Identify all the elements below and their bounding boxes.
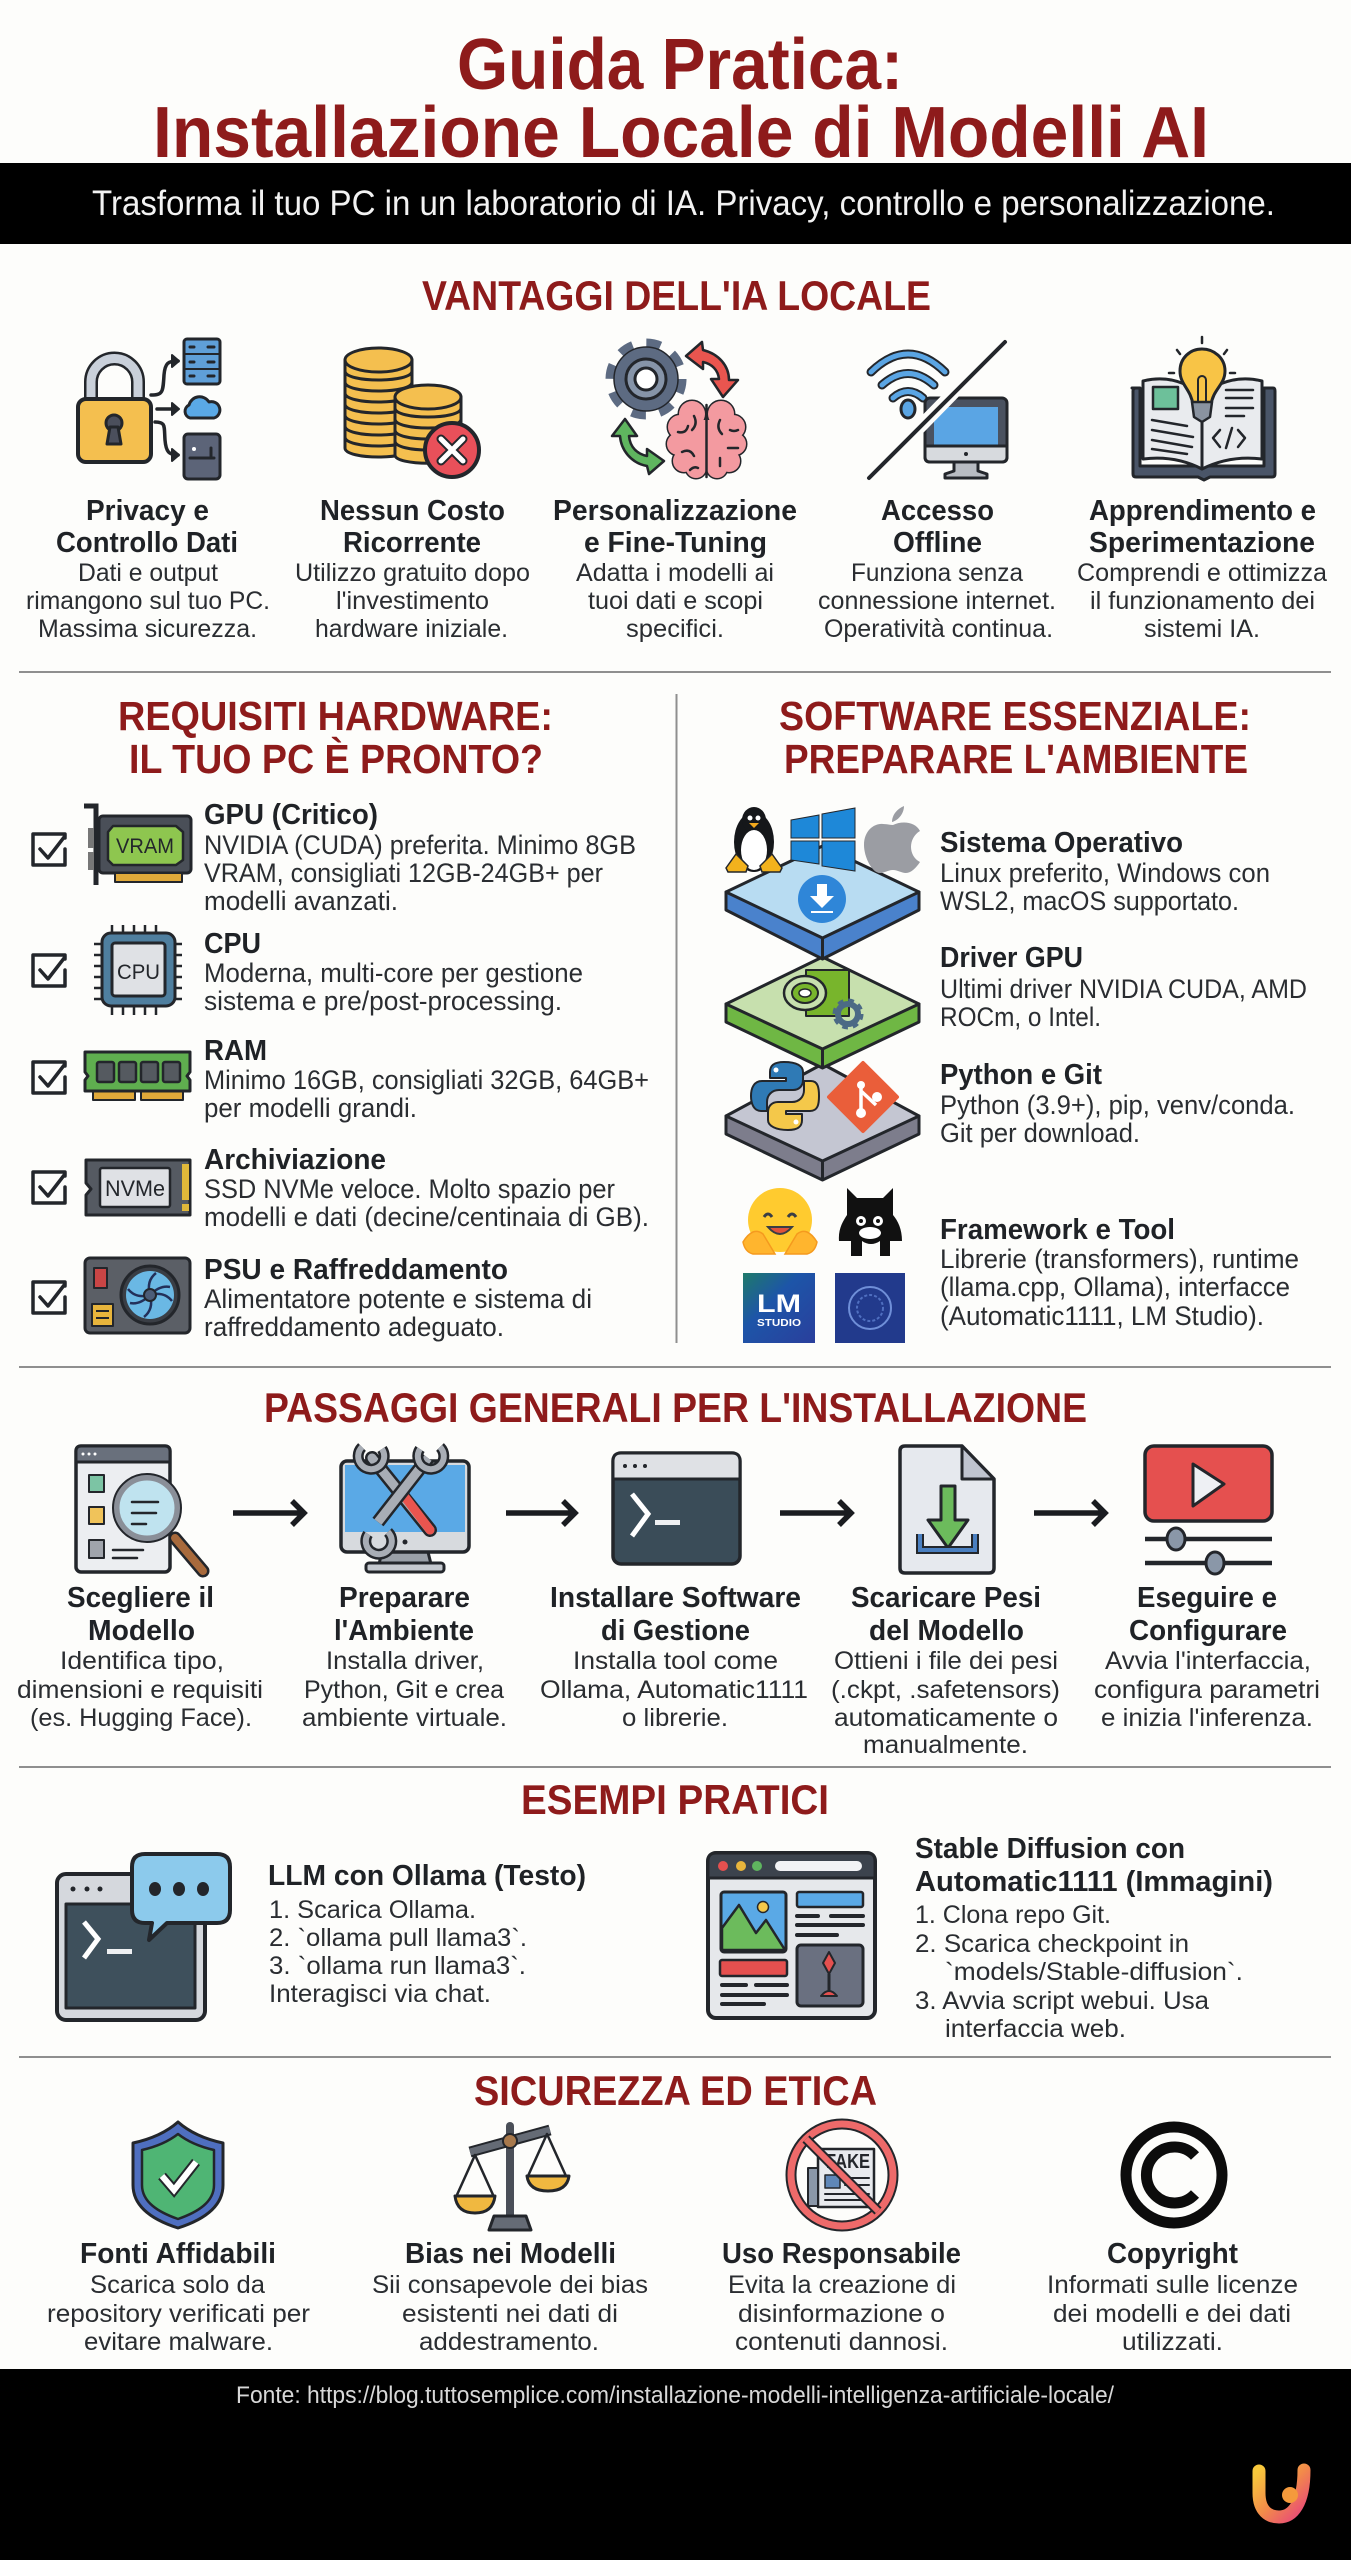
icon: brand logo xyxy=(1259,2470,1304,2517)
icon: prepare environment xyxy=(341,1447,469,1572)
text: python e git xyxy=(940,1059,1295,1148)
title xyxy=(153,25,1209,173)
text: LLM con Ollama: LLM con Ollama (Testo) xyxy=(268,1860,586,1892)
card: accesso offline: Funziona senza xyxy=(851,559,1023,587)
step: eseguire xyxy=(1094,1582,1320,1732)
text: CPU: sistema e pre/post-processing. xyxy=(204,986,562,1016)
text: PSU: PSU e Raffreddamento xyxy=(204,1254,508,1286)
icon: software layer stack xyxy=(726,806,920,1343)
text: archiviazione: modelli e dati (decine/centinaia di GB). xyxy=(204,1202,649,1232)
card: uso responsabile xyxy=(722,2238,961,2356)
text: CPU xyxy=(204,928,583,1016)
text: PSU: raffreddamento adeguato. xyxy=(204,1312,504,1342)
card: nessun costo: Utilizzo gratuito dopo xyxy=(295,559,530,587)
text: PSU xyxy=(204,1254,592,1342)
icon: coins with cross xyxy=(345,348,479,477)
card: accesso offline: Offline xyxy=(893,527,982,559)
text: LLM con Ollama: 2. `ollama pull llama3`. xyxy=(269,1924,527,1952)
card: nessun costo: Nessun Costo xyxy=(320,495,505,527)
card: apprendimento xyxy=(1077,495,1327,643)
card: uso responsabile: Uso Responsabile xyxy=(722,2238,961,2270)
icon: NVMe: NVMe xyxy=(105,1176,165,1201)
icon: balance scale xyxy=(455,2126,569,2230)
text: driver GPU: ROCm, o Intel. xyxy=(940,1002,1101,1032)
text: LLM con Ollama: Interagisci via chat. xyxy=(269,1980,491,2008)
card: bias: Bias nei Modelli xyxy=(405,2238,616,2270)
icon: LM Studio: LM xyxy=(757,1290,801,1318)
card: uso responsabile: Evita la creazione di xyxy=(728,2271,956,2299)
step: scegliere: Identifica tipo, xyxy=(60,1647,224,1675)
card: accesso offline: Operatività continua. xyxy=(824,615,1053,643)
card: apprendimento: Comprendi e ottimizza xyxy=(1077,559,1327,587)
icon: linux penguin xyxy=(726,807,782,872)
icon: open book with bulb xyxy=(1132,337,1275,480)
footer xyxy=(0,2369,1351,2560)
text: stable diffusion: Automatic1111 (Immagini) xyxy=(915,1866,1273,1898)
text: LLM con Ollama: 1. Scarica Ollama. xyxy=(269,1896,476,1924)
text: archiviazione xyxy=(204,1144,649,1232)
card: personalizzazione: specifici. xyxy=(626,615,724,643)
heading: software essenziale xyxy=(779,693,1251,782)
arrow 3 xyxy=(780,1501,851,1525)
text: stable diffusion: 1. Clona repo Git. xyxy=(915,1901,1111,1929)
heading: software essenziale: PREPARARE L'AMBIENTE xyxy=(784,736,1248,782)
card: uso responsabile: contenuti dannosi. xyxy=(735,2328,948,2356)
text: framework e tool: Librerie (transformers), runtime xyxy=(940,1244,1299,1274)
step: preparare: l'Ambiente xyxy=(334,1615,474,1647)
heading: vantaggi: VANTAGGI DELL'IA LOCALE xyxy=(422,272,931,319)
icon: windows logo xyxy=(791,808,855,871)
card: nessun costo: hardware iniziale. xyxy=(315,615,508,643)
icon: automatic1111 logo xyxy=(835,1273,905,1343)
text: GPU: GPU (Critico) xyxy=(204,799,378,831)
card: copyright: Copyright xyxy=(1107,2238,1238,2270)
arrow 1 xyxy=(233,1501,304,1525)
icon: terminal with chat bubble xyxy=(57,1854,230,2020)
card: nessun costo: Ricorrente xyxy=(343,527,481,559)
icon: hugging face xyxy=(743,1188,817,1254)
card: privacy xyxy=(26,495,270,643)
text: sistema operativo: Linux preferito, Windows con xyxy=(940,858,1270,888)
card: fonti affidabili: Scarica solo da xyxy=(90,2271,265,2299)
step: scegliere: Modello xyxy=(88,1615,195,1647)
text: GPU xyxy=(204,799,636,916)
icon: RAM xyxy=(85,1052,190,1100)
step: scaricare xyxy=(831,1582,1060,1759)
step: scaricare: del Modello xyxy=(869,1615,1024,1647)
card: fonti affidabili: repository verificati per xyxy=(47,2300,310,2328)
step: installare: Installare Software xyxy=(550,1582,801,1614)
icon: green layer with nvidia xyxy=(726,957,919,1068)
heading: requisiti hardware xyxy=(118,693,553,782)
icon: GPU: VRAM xyxy=(116,835,174,858)
text: framework e tool: (Automatic1111, LM Studio). xyxy=(940,1301,1264,1331)
step: scegliere xyxy=(17,1582,263,1732)
step: eseguire: Eseguire e xyxy=(1137,1582,1277,1614)
step: installare: o librerie. xyxy=(622,1704,728,1732)
source line: Fonte: https://blog.tuttosemplice.com/installazione-modelli-intelligenza-artificiale-locale/ xyxy=(236,2382,1114,2409)
heading: requisiti hardware: REQUISITI HARDWARE: xyxy=(118,693,553,739)
text: PSU: Alimentatore potente e sistema di xyxy=(204,1284,592,1314)
panel: esempi pratici xyxy=(57,1776,1273,2043)
text: stable diffusion: interfaccia web. xyxy=(945,2015,1126,2043)
card: personalizzazione: e Fine-Tuning xyxy=(584,527,767,559)
card: personalizzazione xyxy=(553,495,797,643)
text: stable diffusion: 3. Avvia script webui. Usa xyxy=(915,1987,1209,2015)
panel: vantaggi dell'IA locale xyxy=(26,272,1327,643)
text: CPU: CPU xyxy=(204,928,261,960)
step: scaricare: automaticamente o xyxy=(834,1704,1058,1732)
text: archiviazione: Archiviazione xyxy=(204,1144,386,1176)
icon: gear, brain and arrows xyxy=(611,342,746,478)
text: LLM con Ollama xyxy=(268,1860,586,2008)
card: apprendimento: il funzionamento dei xyxy=(1090,587,1315,615)
card: apprendimento: Sperimentazione xyxy=(1089,527,1315,559)
card: copyright: dei modelli e dei dati xyxy=(1053,2300,1291,2328)
icon: lock with server, cloud and tower xyxy=(78,339,220,479)
card: personalizzazione: tuoi dati e scopi xyxy=(588,587,763,615)
heading: requisiti hardware: IL TUO PC È PRONTO? xyxy=(129,736,543,782)
card: bias: addestramento. xyxy=(419,2328,599,2356)
step: installare: Installa tool come xyxy=(573,1647,778,1675)
step: eseguire: configura parametri xyxy=(1094,1676,1320,1704)
card: privacy: Massima sicurezza. xyxy=(38,615,257,643)
icon: no fake news: FAKE xyxy=(826,2151,870,2173)
step: scegliere: (es. Hugging Face). xyxy=(30,1704,252,1732)
text: stable diffusion xyxy=(915,1833,1273,2043)
step: scaricare: manualmente. xyxy=(863,1731,1028,1759)
icon: PSU and cooling xyxy=(85,1258,190,1333)
card: personalizzazione: Adatta i modelli ai xyxy=(576,559,774,587)
icon: LM Studio xyxy=(743,1273,815,1343)
step: preparare: Preparare xyxy=(339,1582,470,1614)
card: accesso offline: Accesso xyxy=(881,495,994,527)
text: RAM: RAM xyxy=(204,1035,267,1067)
card: bias: Sii consapevole dei bias xyxy=(372,2271,648,2299)
icon: terminal xyxy=(613,1453,740,1564)
icon: offline wifi and monitor xyxy=(869,340,1007,479)
text: framework e tool: Framework e Tool xyxy=(940,1214,1175,1246)
icon: NVMe xyxy=(86,1160,190,1215)
card: fonti affidabili xyxy=(47,2238,310,2356)
card: bias xyxy=(372,2238,648,2356)
subtitle banner: Trasforma il tuo PC in un laboratorio di IA. Privacy, controllo e personalizzazione. xyxy=(92,184,1275,223)
text: driver GPU: Ultimi driver NVIDIA CUDA, AMD xyxy=(940,974,1307,1004)
text: sistema operativo xyxy=(940,827,1270,916)
icon: LM Studio: STUDIO xyxy=(757,1318,801,1329)
panel: sicurezza ed etica xyxy=(47,2067,1298,2356)
text: stable diffusion: Stable Diffusion con xyxy=(915,1833,1185,1865)
card: privacy: Dati e output xyxy=(78,559,218,587)
step: preparare xyxy=(302,1582,507,1732)
heading: passaggi: PASSAGGI GENERALI PER L'INSTALLAZIONE xyxy=(264,1384,1087,1431)
icon: CPU: CPU xyxy=(117,961,160,984)
arrow 2 xyxy=(506,1501,575,1525)
step: eseguire: Configurare xyxy=(1129,1615,1287,1647)
step: installare: di Gestione xyxy=(601,1615,750,1647)
heading: software essenziale: SOFTWARE ESSENZIALE: xyxy=(779,693,1251,739)
card: apprendimento: Apprendimento e xyxy=(1089,495,1316,527)
step: preparare: ambiente virtuale. xyxy=(302,1704,507,1732)
icon: GPU xyxy=(84,806,191,885)
text: GPU: NVIDIA (CUDA) preferita. Minimo 8GB xyxy=(204,830,636,860)
card: fonti affidabili: Fonti Affidabili xyxy=(80,2238,276,2270)
step: preparare: Installa driver, xyxy=(326,1647,484,1675)
icon: ollama llama xyxy=(839,1188,902,1256)
text: stable diffusion: 2. Scarica checkpoint in xyxy=(915,1930,1189,1958)
card: nessun costo: l'investimento xyxy=(336,587,489,615)
icon: choose model xyxy=(76,1446,203,1572)
arrow 4 xyxy=(1034,1501,1105,1525)
card: apprendimento: sistemi IA. xyxy=(1144,615,1260,643)
text: python e git: Python e Git xyxy=(940,1059,1102,1091)
text: sistema operativo: WSL2, macOS supportato. xyxy=(940,886,1239,916)
text: sistema operativo: Sistema Operativo xyxy=(940,827,1183,859)
card: privacy: Controllo Dati xyxy=(56,527,238,559)
text: RAM xyxy=(204,1035,649,1123)
text: driver GPU: Driver GPU xyxy=(940,942,1083,974)
icon: shield xyxy=(133,2122,223,2228)
text: LLM con Ollama: 3. `ollama run llama3`. xyxy=(269,1952,526,1980)
card: nessun costo xyxy=(295,495,530,643)
card: fonti affidabili: evitare malware. xyxy=(84,2328,273,2356)
step: installare: Ollama, Automatic1111 xyxy=(540,1676,808,1704)
icon: blue layer with download xyxy=(726,846,919,959)
card: accesso offline xyxy=(818,495,1056,643)
text: python e git: Git per download. xyxy=(940,1118,1140,1148)
text: CPU: Moderna, multi-core per gestione xyxy=(204,958,583,988)
card: bias: esistenti nei dati di xyxy=(402,2300,618,2328)
text: archiviazione: SSD NVMe veloce. Molto spazio per xyxy=(204,1174,615,1204)
card: copyright: Informati sulle licenze xyxy=(1047,2271,1298,2299)
icon: run and configure xyxy=(1145,1446,1272,1574)
step: installare xyxy=(540,1582,808,1732)
text: RAM: Minimo 16GB, consigliati 32GB, 64GB+ xyxy=(204,1065,649,1095)
title: Installazione Locale di Modelli AI xyxy=(153,93,1209,173)
heading: sicurezza: SICUREZZA ED ETICA xyxy=(474,2067,877,2114)
subtitle banner xyxy=(0,163,1351,244)
icon: copyright xyxy=(1126,2127,1222,2223)
icon: no fake news xyxy=(791,2124,893,2226)
panel: requisiti hardware xyxy=(33,693,649,1342)
text: python e git: Python (3.9+), pip, venv/conda. xyxy=(940,1090,1295,1120)
title: Guida Pratica: xyxy=(457,25,903,105)
checkboxes xyxy=(33,834,65,1313)
icon: web interface xyxy=(708,1853,875,2018)
text: GPU: VRAM, consigliati 12GB-24GB+ per xyxy=(204,858,603,888)
step: scaricare: Ottieni i file dei pesi xyxy=(834,1647,1058,1675)
text: framework e tool: (llama.cpp, Ollama), interfacce xyxy=(940,1272,1290,1302)
card: accesso offline: connessione internet. xyxy=(818,587,1056,615)
step: scaricare: Scaricare Pesi xyxy=(851,1582,1041,1614)
panel: software essenziale xyxy=(726,693,1307,1343)
text: GPU: modelli avanzati. xyxy=(204,886,398,916)
text: framework e tool xyxy=(940,1214,1299,1331)
card: uso responsabile: disinformazione o xyxy=(738,2300,945,2328)
step: scegliere: dimensioni e requisiti xyxy=(17,1676,263,1704)
icon: CPU xyxy=(94,925,182,1015)
heading: esempi: ESEMPI PRATICI xyxy=(521,1776,829,1823)
step: eseguire: Avvia l'interfaccia, xyxy=(1105,1647,1311,1675)
card: privacy: rimangono sul tuo PC. xyxy=(26,587,270,615)
text: stable diffusion: `models/Stable-diffusion`. xyxy=(945,1958,1243,1986)
icon: grey layer with python and git xyxy=(726,1062,919,1180)
panel: passaggi generali xyxy=(17,1384,1320,1759)
step: preparare: Python, Git e crea xyxy=(304,1676,504,1704)
card: privacy: Privacy e xyxy=(86,495,209,527)
text: RAM: per modelli grandi. xyxy=(204,1093,417,1123)
card: copyright xyxy=(1047,2238,1298,2356)
step: scaricare: (.ckpt, .safetensors) xyxy=(831,1676,1060,1704)
text: driver GPU xyxy=(940,942,1307,1032)
card: copyright: utilizzati. xyxy=(1122,2328,1223,2356)
icon: apple logo xyxy=(864,806,920,873)
step: eseguire: e inizia l'inferenza. xyxy=(1101,1704,1313,1732)
step: scegliere: Scegliere il xyxy=(67,1582,214,1614)
card: personalizzazione: Personalizzazione xyxy=(553,495,797,527)
icon: download weights file xyxy=(900,1446,994,1573)
